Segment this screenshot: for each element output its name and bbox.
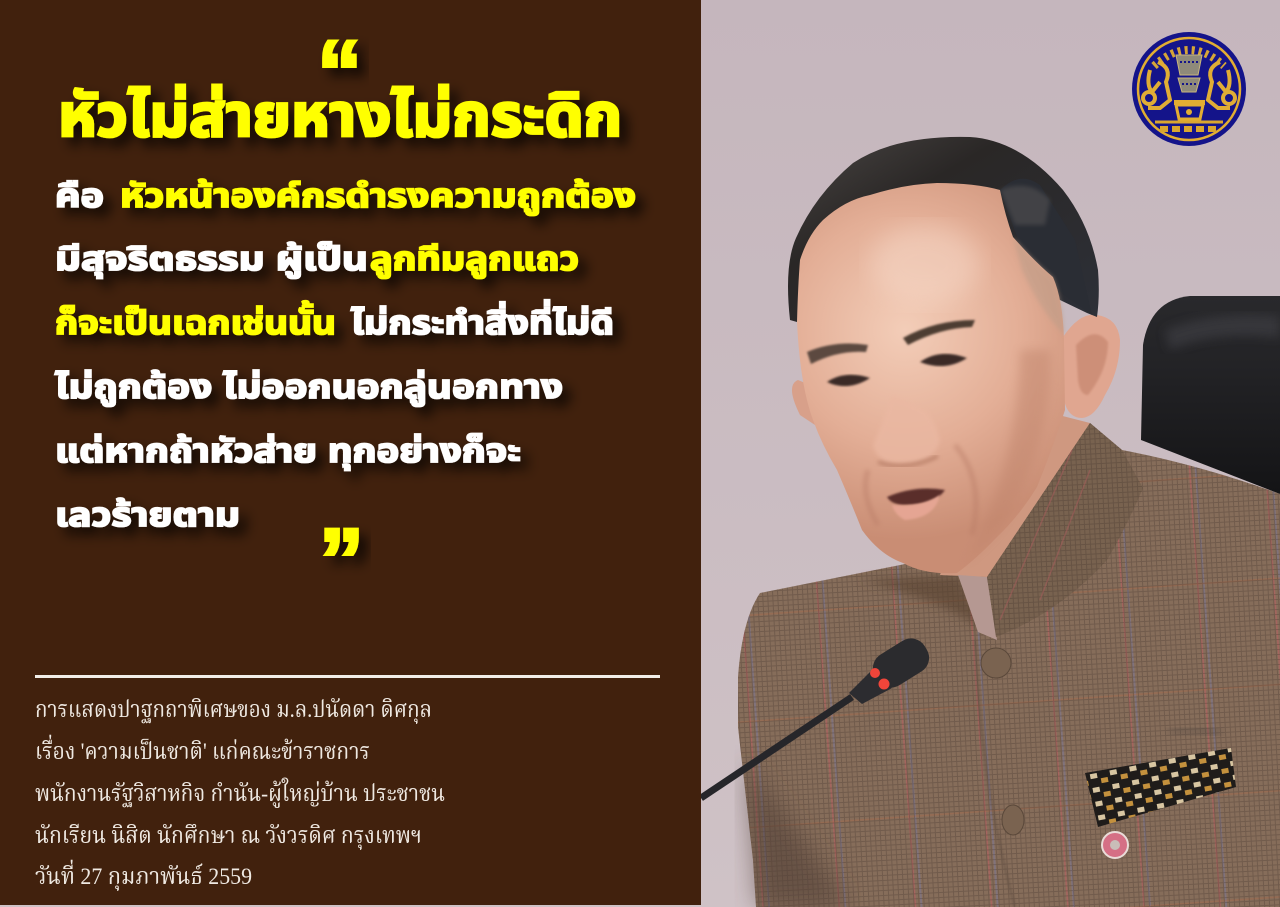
smile lines xyxy=(866,445,976,535)
seal base row xyxy=(1155,120,1223,124)
photo: microphone xyxy=(701,632,935,798)
left ear xyxy=(792,380,815,425)
panel: quote xyxy=(0,0,701,905)
quote line 6: เลวร้ายตาม xyxy=(55,496,240,533)
quote line 1: หัวหน้าองค์กรดำรงความถูกต้อง xyxy=(120,177,636,216)
forehead highlight xyxy=(870,225,980,305)
placket edge xyxy=(975,640,1015,907)
quote line 4: ไม่ถูกต้อง ไม่ออกนอกลู่นอกทาง xyxy=(55,368,563,407)
quote line 2: มีสุจริตธรรม ผู้เป็น xyxy=(55,240,368,279)
nose xyxy=(873,395,940,463)
hair xyxy=(788,137,1099,322)
quote line 5: แต่หากถ้าหัวส่าย ทุกอย่างก็จะ xyxy=(55,432,521,471)
source caption xyxy=(35,697,445,891)
divider xyxy=(35,675,660,678)
neck xyxy=(940,400,1090,577)
jacket button lower xyxy=(1002,805,1024,835)
seal urn xyxy=(1176,55,1202,92)
jacket button upper xyxy=(981,648,1011,678)
caption line 4: นักเรียน นิสิต นักศึกษา ณ วังวรดิศ กรุงเทพฯ xyxy=(35,823,422,850)
caption line 3: พนักงานรัฐวิสาหกิจ กำนัน-ผู้ใหญ่บ้าน ประชาชน xyxy=(35,777,445,808)
eyes xyxy=(827,375,870,386)
lapel pin xyxy=(1102,832,1128,858)
seal flame border xyxy=(1154,50,1224,66)
collar xyxy=(987,423,1143,637)
quote line 3: ไม่กระทำสิ่งที่ไม่ดี xyxy=(351,299,614,341)
quote line 2: ลูกทีมลูกแถว xyxy=(370,240,579,279)
jaw shading xyxy=(965,350,1050,565)
quote line 1: คือ xyxy=(55,177,104,214)
temple stubble xyxy=(1013,237,1064,335)
caption line 1: การแสดงปาฐกถาพิเศษของ ม.ล.ปนัดดา ดิศกุล xyxy=(35,697,432,724)
photo: office chair xyxy=(1141,296,1280,494)
photo: speaker portrait xyxy=(738,137,1280,907)
caption line 5: วันที่ 27 กุมภาพันธ์ 2559 xyxy=(35,859,252,891)
closing quote mark: ” xyxy=(319,511,364,611)
right ear xyxy=(1063,315,1120,418)
caption line 2: เรื่อง 'ความเป็นชาติ' แก่คณะข้าราชการ xyxy=(35,734,370,764)
seal lions xyxy=(1143,62,1235,108)
quote line 3: ก็จะเป็นเฉกเช่นนั้น xyxy=(55,300,336,341)
quote line 3 xyxy=(55,299,614,341)
headline: หัวไม่ส่ายหางไม่กระดิก xyxy=(58,82,622,149)
quote line 2 xyxy=(55,240,579,279)
mouth xyxy=(887,489,945,505)
quote body xyxy=(55,177,636,533)
opening quote mark: “ xyxy=(317,23,362,123)
seal pedestal xyxy=(1174,100,1205,119)
face xyxy=(797,183,1065,573)
emblem: government seal xyxy=(1132,32,1246,146)
suit jacket xyxy=(738,423,1280,907)
shirt xyxy=(958,575,997,640)
microphone indicator lights xyxy=(870,668,890,690)
pocket square xyxy=(1085,748,1236,827)
eyebrows xyxy=(807,344,868,364)
jacket shading xyxy=(745,760,850,907)
